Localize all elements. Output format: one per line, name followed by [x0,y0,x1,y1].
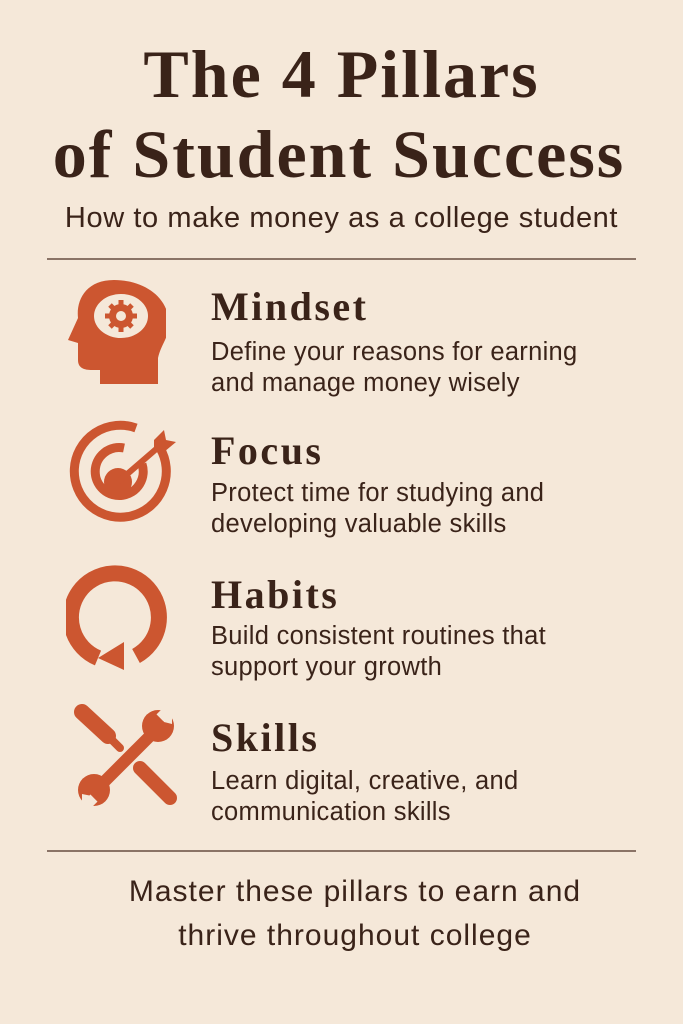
heading: Skills: Skills [211,715,319,760]
footer text [129,875,581,952]
text: skills: communication skills [211,798,451,826]
icon: target [70,420,176,522]
text: skills: Learn digital, creative, and [211,767,519,795]
icon: tools [74,704,177,806]
text: habits: Build consistent routines that [211,622,546,650]
footer text: Master these pillars to earn and [129,875,581,908]
text: mindset [211,338,578,397]
text: focus: Protect time for studying and [211,479,544,507]
subtitle: How to make money as a college student [65,202,618,234]
heading: Mindset: Mindset [211,284,368,329]
icon: head with gear [68,280,166,384]
heading: Habits: Habits [211,572,339,617]
text: focus: developing valuable skills [211,510,507,538]
text: habits: support your growth [211,653,442,681]
heading: Focus: Focus [211,428,324,473]
text: focus [211,479,544,538]
icon: cycle arrow [66,565,167,670]
title: of Student Success [53,116,625,192]
title [53,36,625,192]
title: The 4 Pillars [143,36,540,112]
text: mindset: Define your reasons for earning [211,338,578,366]
text: habits [211,622,546,681]
text: mindset: and manage money wisely [211,369,520,397]
text: skills [211,767,519,826]
footer text: thrive throughout college [178,919,532,952]
